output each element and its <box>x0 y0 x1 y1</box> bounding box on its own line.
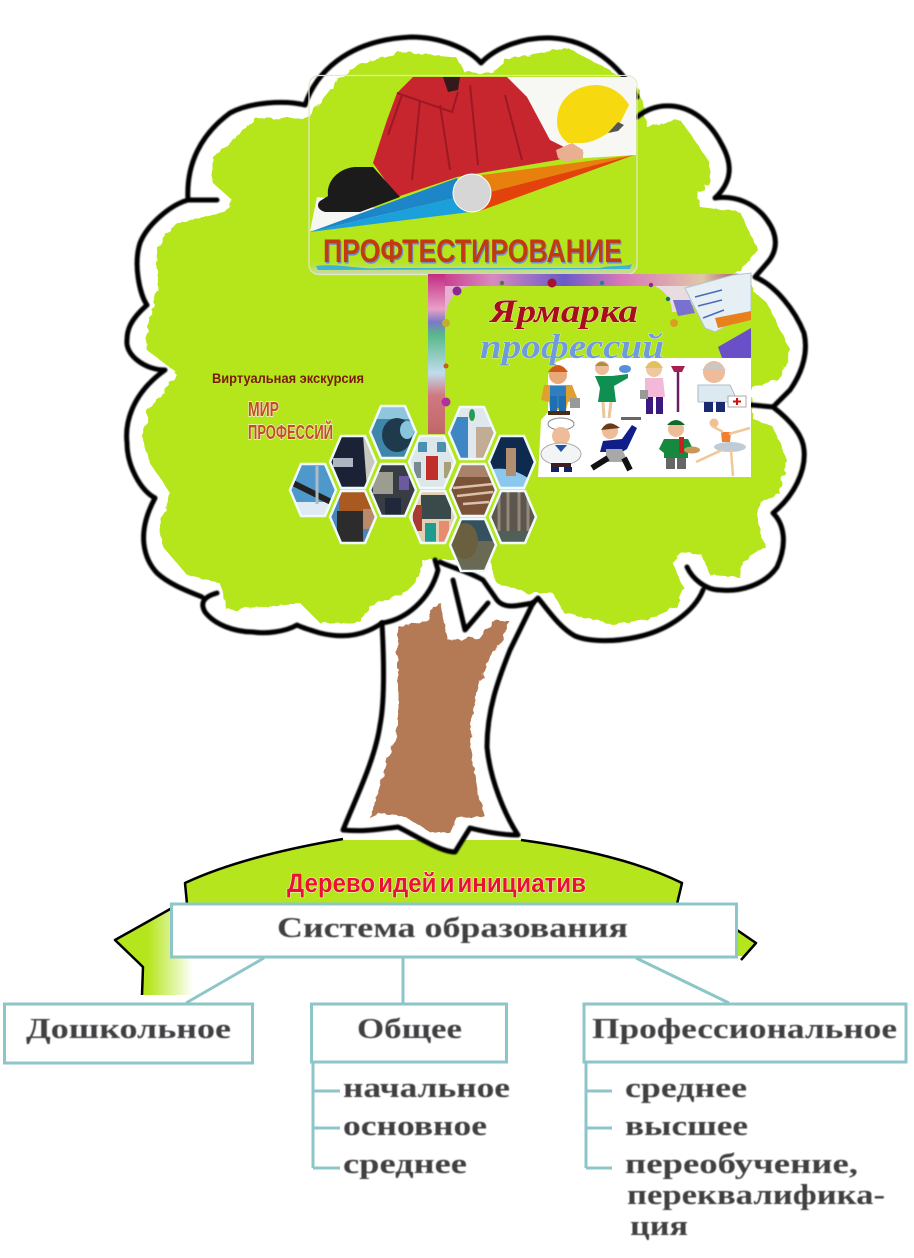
connectors <box>186 958 729 1168</box>
trunk outline <box>343 560 533 852</box>
box: education system: Система образования <box>277 913 628 944</box>
crown outline <box>127 37 805 641</box>
world of professions label: ПРОФЕССИЙ <box>248 420 333 444</box>
hex: factory <box>369 463 417 517</box>
list: general education <box>343 1073 510 1180</box>
hex: technology <box>369 405 417 459</box>
proftesting label: ПРОФТЕСТИРОВАНИЕ <box>323 233 622 269</box>
ballerina <box>696 418 750 476</box>
painter <box>659 420 700 469</box>
doctor <box>698 361 746 412</box>
teal wave strip <box>316 264 632 270</box>
hex: office <box>448 406 496 460</box>
box: general <box>312 1004 506 1062</box>
purple corner <box>718 328 751 358</box>
decorative frame <box>428 274 751 286</box>
hex: soldier <box>449 518 497 572</box>
hex: mine tunnel <box>449 463 497 517</box>
virtual tour caption: Виртуальная экскурсия <box>212 371 364 386</box>
chef <box>541 418 581 472</box>
white people panel <box>538 358 751 477</box>
list: professional education: среднее <box>625 1073 747 1104</box>
world of professions label <box>248 399 333 444</box>
proftesting bottom rim <box>310 262 636 275</box>
list: general education: среднее <box>343 1149 467 1180</box>
world of professions label: МИР <box>248 399 279 421</box>
list: professional education: переобучение, <box>625 1149 858 1180</box>
hexagon photo collage <box>289 405 537 572</box>
waitress <box>595 361 631 418</box>
compass pencil <box>310 178 463 232</box>
white photo background <box>507 77 636 160</box>
box: general: Общее <box>357 1014 462 1045</box>
cleaner <box>640 361 685 414</box>
hex: bridge <box>289 463 337 517</box>
photo: job fair <box>428 273 751 477</box>
tree trunk <box>343 560 533 852</box>
hairdresser <box>592 417 641 470</box>
red gown <box>373 77 584 197</box>
hand <box>556 143 583 162</box>
list: general education: основное <box>343 1111 487 1142</box>
hex: forest <box>489 490 537 544</box>
yellow hard hat <box>557 85 629 143</box>
box: professional: Профессиональное <box>592 1014 897 1045</box>
list: professional education: ция <box>630 1211 688 1242</box>
tree title: Дерево идей и инициатив <box>287 868 586 898</box>
box: education system <box>172 904 736 957</box>
hex: mining truck <box>329 490 377 544</box>
job fair subtitle: профессий <box>480 327 664 366</box>
list: general education: начальное <box>343 1073 510 1104</box>
photo: proftesting <box>309 76 637 275</box>
tree crown <box>127 37 805 641</box>
list: professional education: высшее <box>625 1111 748 1142</box>
list: professional education <box>625 1073 885 1242</box>
trunk brown fill <box>370 602 508 833</box>
worker <box>541 365 580 415</box>
hex: police <box>329 435 377 489</box>
box: preschool: Дошкольное <box>26 1014 231 1045</box>
job fair title: Ярмарка <box>489 294 638 330</box>
hex: classroom <box>409 490 457 544</box>
black hat <box>318 167 400 212</box>
hex: logistics <box>408 435 456 489</box>
ground mound <box>115 839 756 995</box>
beads <box>442 278 678 406</box>
crown green foliage <box>143 48 790 625</box>
list: professional education: переквалифика- <box>627 1180 885 1211</box>
photo frame <box>309 76 637 274</box>
education system diagram <box>4 904 906 1242</box>
open book <box>685 273 751 332</box>
box: preschool <box>4 1004 252 1063</box>
orange pencil <box>715 311 751 328</box>
hex: astronaut <box>488 435 536 489</box>
proftesting label: ПРОФТЕСТИРОВАНИЕ <box>324 234 623 270</box>
box: professional <box>584 1004 906 1062</box>
